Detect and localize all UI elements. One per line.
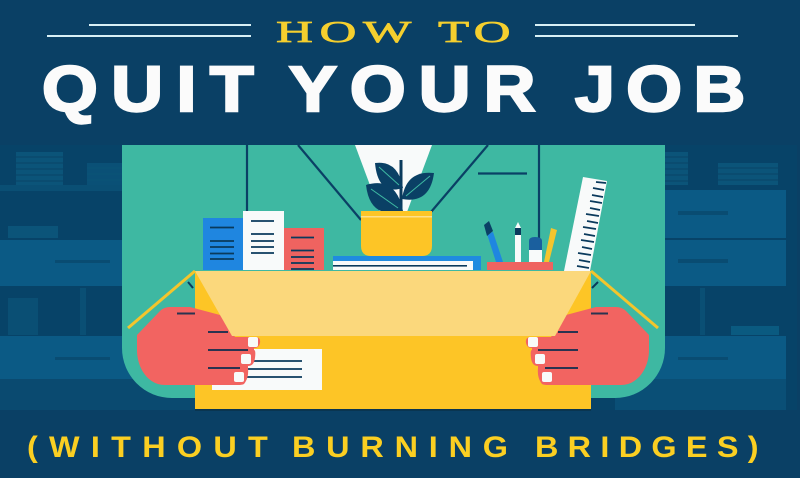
subtitle: without burning bridges: BRIDGES) <box>535 430 759 464</box>
background: left bookshelf <box>0 145 195 410</box>
subtitle: without burning bridges <box>27 430 759 464</box>
pen cup <box>487 262 553 270</box>
white binder <box>243 211 284 270</box>
title: quit your job <box>42 54 745 125</box>
title: quit your job: QUIT <box>42 54 254 125</box>
box lid <box>195 271 591 336</box>
title: how to: HOW <box>276 15 411 49</box>
right box flap <box>591 271 658 328</box>
yellow pot <box>361 211 432 256</box>
title: how to <box>47 15 738 49</box>
flap marks <box>188 282 598 288</box>
stack of books <box>333 256 481 270</box>
subtitle: without burning bridges: (WITHOUT <box>27 430 268 464</box>
left hand <box>137 307 260 385</box>
plant <box>366 160 434 213</box>
cardboard box body <box>195 271 591 409</box>
right hand <box>526 307 649 385</box>
background: right bookshelf <box>591 145 797 410</box>
subtitle: without burning bridges: BURNING <box>292 430 508 464</box>
shipping label <box>212 349 322 390</box>
title: quit your job: YOUR <box>289 54 535 125</box>
wall lines <box>247 145 539 240</box>
box shadow line <box>195 409 591 411</box>
pens and pencils <box>484 221 557 262</box>
title: quit your job: JOB <box>575 54 745 125</box>
red binder <box>284 228 324 270</box>
blue binder <box>203 218 243 270</box>
spotlight <box>355 145 432 212</box>
left box flap <box>128 271 195 328</box>
title: how to: TO <box>438 15 511 49</box>
teal panel <box>122 145 665 398</box>
ruler <box>564 177 607 271</box>
